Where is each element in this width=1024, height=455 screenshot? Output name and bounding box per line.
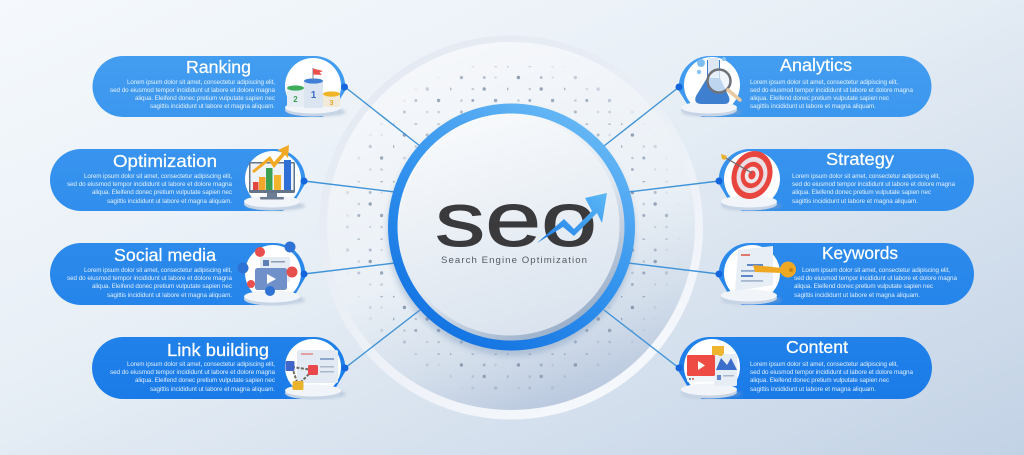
panel: Analytics bbox=[676, 55, 931, 117]
icon: chart monitor bbox=[244, 145, 305, 210]
icon: key and page bbox=[721, 245, 796, 304]
node bbox=[676, 84, 682, 90]
icon: podium bbox=[285, 58, 346, 116]
center SEO badge bbox=[387, 104, 635, 356]
heading: Social media bbox=[114, 245, 216, 265]
panel: Content bbox=[676, 337, 932, 399]
body text: Lorem ipsum dolor sit amet, consectetur adipiscing elit, bbox=[750, 361, 898, 368]
heading: Keywords bbox=[822, 243, 898, 263]
node bbox=[676, 364, 682, 372]
icon: chain links bbox=[285, 339, 346, 400]
body text: aliqua. Eleifend donec pretium vulputate sapien nec bbox=[794, 283, 933, 290]
icon: podium: 1 bbox=[311, 90, 317, 101]
body text: Lorem ipsum dolor sit amet, consectetur adipiscing elit, bbox=[750, 79, 898, 86]
body text bbox=[792, 173, 955, 205]
seo wordmark: seo bbox=[435, 178, 597, 263]
panel: Keywords bbox=[716, 243, 974, 305]
heading: Optimization bbox=[113, 151, 217, 171]
body text: aliqua. Eleifend donec pretium vulputate sapien nec bbox=[750, 377, 889, 384]
body text bbox=[750, 79, 913, 110]
node bbox=[300, 270, 308, 278]
body text bbox=[67, 173, 232, 205]
node bbox=[342, 364, 348, 372]
growth arrow bbox=[537, 193, 607, 243]
outer rim bbox=[319, 36, 703, 420]
body text: aliqua. Eleifend donec pretium vulputate sapien nec bbox=[135, 377, 275, 384]
panel: Strategy bbox=[716, 145, 974, 211]
blue ring bbox=[388, 104, 635, 350]
body text: Lorem ipsum dolor sit amet, consectetur adipiscing elit, bbox=[802, 267, 950, 274]
body text: sagittis incididunt ut labore et magna aliquam. bbox=[150, 386, 275, 393]
body text bbox=[750, 361, 913, 393]
body text: Lorem ipsum dolor sit amet, consectetur adipiscing elit, bbox=[84, 267, 232, 274]
body text: sagittis incididunt ut labore et magna aliquam. bbox=[750, 103, 876, 110]
icon: media cards bbox=[681, 339, 742, 398]
icon: flask and magnifier bbox=[681, 57, 742, 116]
panel: Link building bbox=[92, 337, 348, 400]
body text: aliqua. Eleifend donec pretium vulputate sapien nec bbox=[92, 283, 232, 290]
icon: podium: 3 bbox=[330, 100, 334, 107]
pill bbox=[50, 243, 305, 305]
body text: sagittis incididunt ut labore et magna aliquam. bbox=[750, 386, 876, 393]
connector lines bbox=[304, 87, 719, 368]
body text: sagittis incididunt ut labore et magna aliquam. bbox=[107, 292, 232, 299]
body text: Lorem ipsum dolor sit amet, consectetur adipiscing elit, bbox=[792, 173, 940, 180]
node bbox=[716, 178, 722, 184]
body text: aliqua. Eleifend donec pretium vulputate sapien nec bbox=[750, 95, 889, 102]
icon: target bbox=[721, 145, 782, 210]
body text: sagittis incididunt ut labore et magna aliquam. bbox=[794, 292, 920, 299]
body text: Lorem ipsum dolor sit amet, consectetur adipiscing elit, bbox=[127, 361, 275, 368]
pill bbox=[679, 337, 932, 399]
body text: Lorem ipsum dolor sit amet, consectetur adipiscing elit, bbox=[127, 79, 275, 86]
pill bbox=[719, 149, 974, 211]
dot grid bbox=[346, 66, 680, 390]
node bbox=[300, 178, 308, 184]
icon: podium: 2 bbox=[293, 95, 298, 104]
body text bbox=[110, 361, 275, 393]
body text: aliqua. Eleifend donec pretium vulputate sapien nec bbox=[135, 95, 275, 102]
heading: Analytics bbox=[780, 55, 852, 75]
pill bbox=[93, 56, 345, 117]
body text: sagittis incididunt ut labore et magna aliquam. bbox=[792, 198, 918, 205]
node bbox=[716, 270, 722, 278]
body text bbox=[794, 267, 957, 299]
pill bbox=[92, 337, 345, 399]
body text: sed do eiusmod tempor incididunt ut labore et dolore magna bbox=[110, 87, 275, 94]
body text: sed do eiusmod tempor incididunt ut labore et dolore magna bbox=[110, 369, 275, 376]
body text bbox=[110, 79, 275, 110]
body text: sed do eiusmod tempor incididunt ut labore et dolore magna bbox=[792, 181, 955, 188]
body text: sed do eiusmod tempor incididunt ut labore et dolore magna bbox=[67, 275, 232, 282]
tagline: Search Engine Optimization bbox=[441, 255, 587, 266]
white bevel bbox=[398, 114, 624, 340]
inner disc bbox=[327, 42, 695, 410]
pill bbox=[679, 56, 931, 117]
heading: Strategy bbox=[826, 149, 894, 169]
heading: Content bbox=[786, 337, 848, 357]
panel: Social media bbox=[50, 242, 308, 306]
node bbox=[341, 84, 348, 90]
icon: social video bbox=[238, 242, 305, 306]
heading: Link building bbox=[167, 340, 269, 360]
pill bbox=[50, 149, 305, 211]
body text bbox=[67, 267, 232, 299]
body text: sed do eiusmod tempor incididunt ut labore et dolore magna bbox=[750, 87, 913, 94]
white face bbox=[400, 116, 620, 336]
badge shadow bbox=[387, 108, 635, 356]
heading: Ranking bbox=[186, 57, 251, 77]
central hub bbox=[319, 36, 703, 420]
body text: sed do eiusmod tempor incididunt ut labore et dolore magna bbox=[750, 369, 913, 376]
pill bbox=[719, 243, 974, 305]
body text: Lorem ipsum dolor sit amet, consectetur adipiscing elit, bbox=[84, 173, 232, 180]
body text: aliqua. Eleifend donec pretium vulputate sapien nec bbox=[92, 189, 232, 196]
panel: Ranking bbox=[93, 56, 348, 117]
body text: sagittis incididunt ut labore et magna aliquam. bbox=[150, 103, 275, 110]
body text: aliqua. Eleifend donec pretium vulputate sapien nec bbox=[792, 189, 931, 196]
body text: sagittis incididunt ut labore et magna aliquam. bbox=[107, 198, 232, 205]
panel: Optimization bbox=[50, 145, 308, 211]
body text: sed do eiusmod tempor incididunt ut labore et dolore magna bbox=[794, 275, 957, 282]
body text: sed do eiusmod tempor incididunt ut labore et dolore magna bbox=[67, 181, 232, 188]
